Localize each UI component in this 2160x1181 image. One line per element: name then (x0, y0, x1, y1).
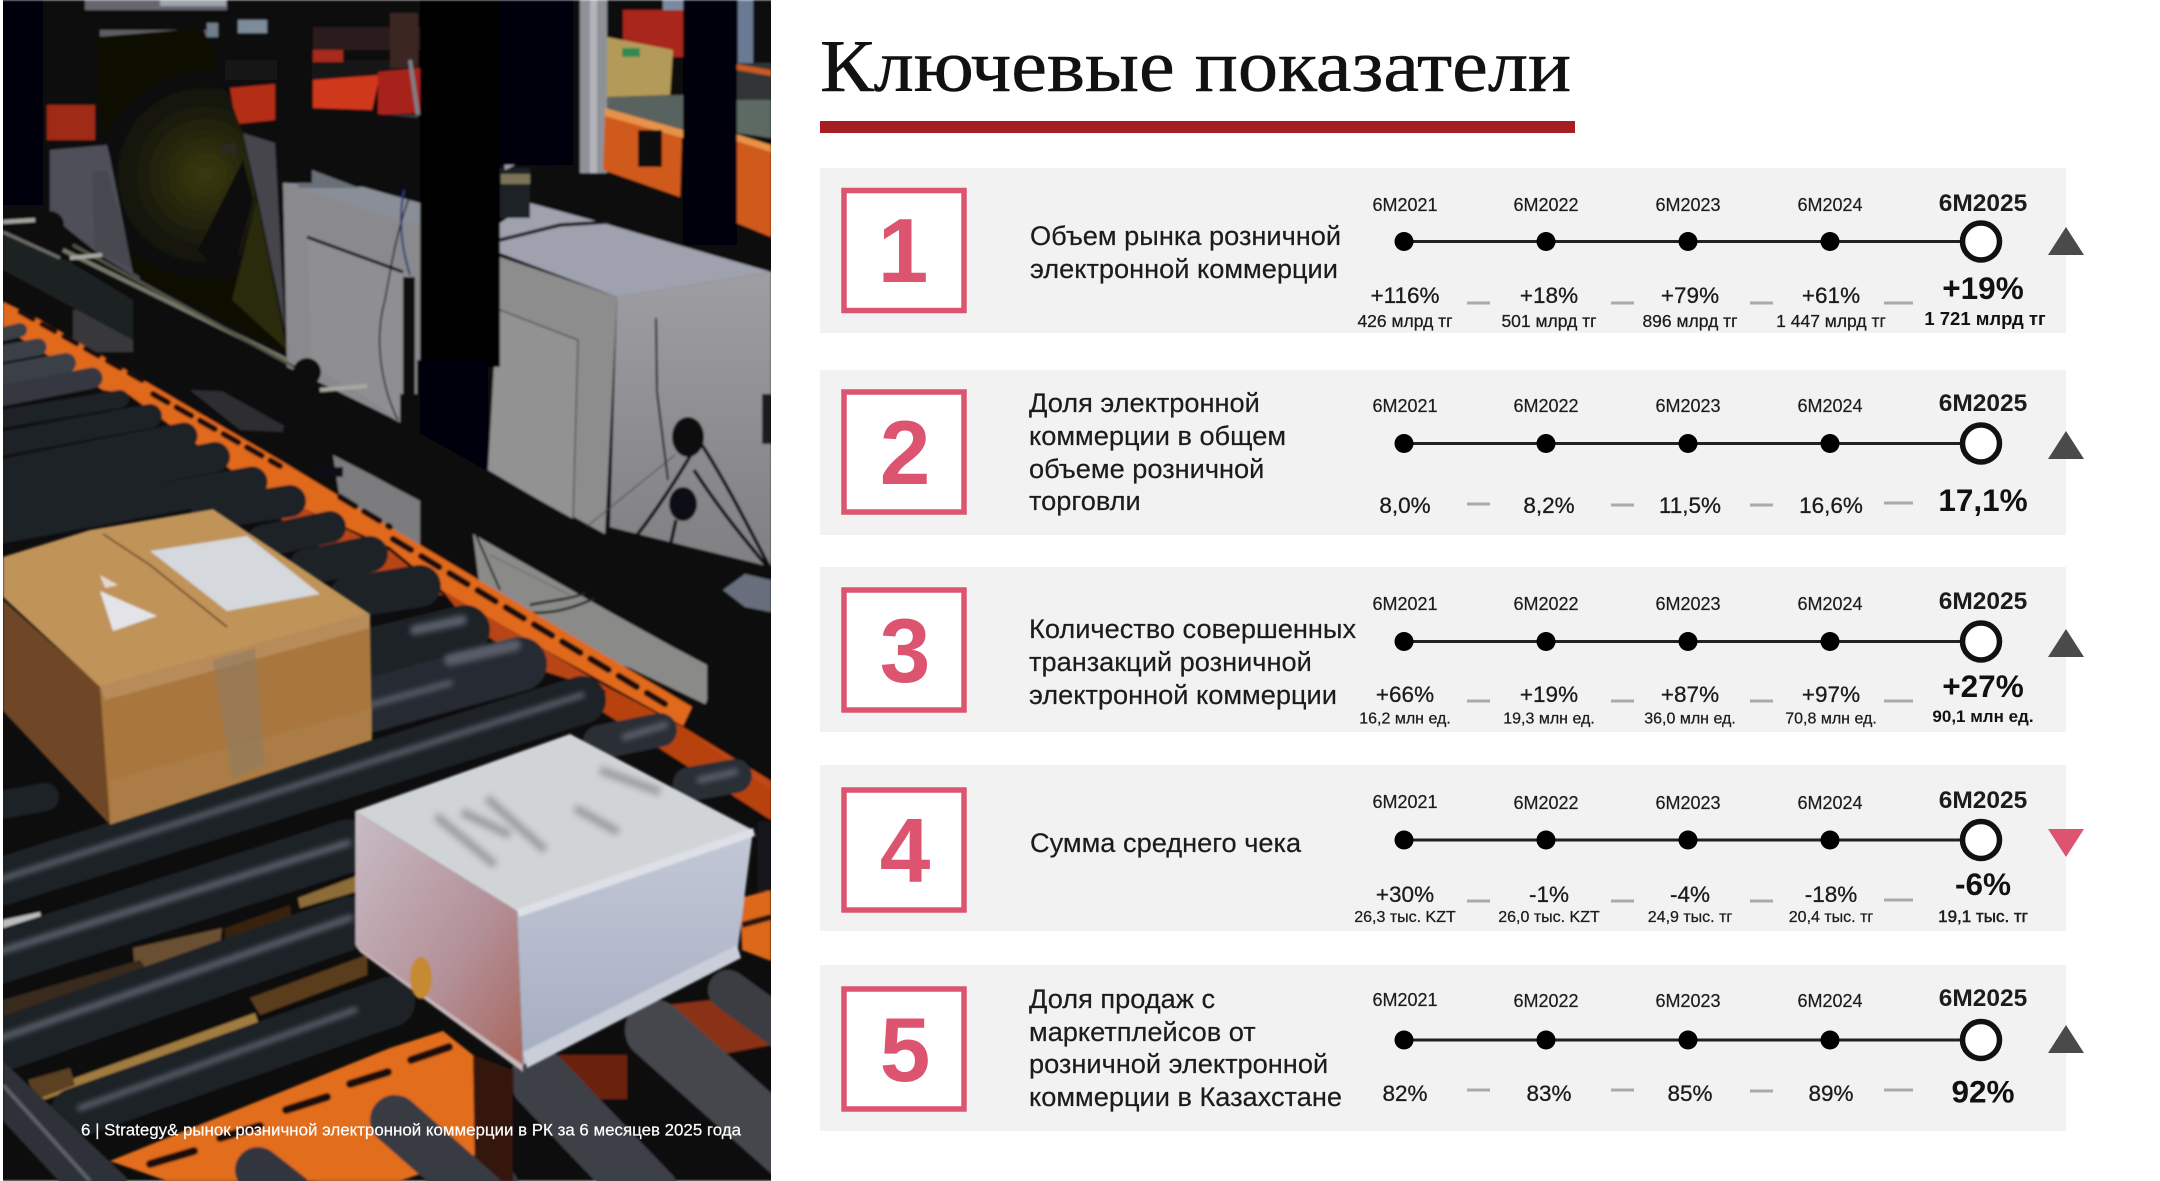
timeline 4: -18% (1805, 882, 1857, 907)
metric 2 description: коммерции в общем (1029, 420, 1286, 451)
timeline 1: 426 млрд тг (1357, 311, 1453, 331)
timeline 4: 6M2024 (1797, 793, 1863, 813)
panel: metric 1 (820, 168, 2084, 333)
timeline 4: 6M2025 (1939, 787, 2027, 814)
timeline 1: 6M2024 (1797, 195, 1863, 215)
timeline 4: -6% (1955, 866, 2011, 902)
timeline 3: 16,2 млн ед. (1359, 710, 1451, 728)
timeline 5: 6M2023 (1655, 991, 1721, 1011)
timeline 5: 6M2024 (1797, 991, 1863, 1011)
number badge 4 (844, 790, 964, 910)
timeline 3: 19,3 млн ед. (1503, 710, 1595, 728)
metric 5 description: розничной электронной (1029, 1048, 1328, 1079)
metric 1 description: электронной коммерции (1030, 253, 1338, 284)
timeline 1: 6M2021 (1372, 195, 1438, 215)
timeline 1 (1357, 190, 2046, 331)
panel: metric 4 (820, 765, 2084, 931)
timeline 1: 1 447 млрд тг (1776, 311, 1886, 331)
timeline 3: 6M2025 (1939, 588, 2027, 615)
timeline 1: 6M2025 (1939, 190, 2027, 217)
timeline 1: +61% (1802, 283, 1860, 308)
metric 3 description: транзакций розничной (1029, 646, 1312, 677)
panel: metric 2 (820, 370, 2084, 535)
timeline 1: +116% (1370, 283, 1440, 308)
metric 4 description: Сумма среднего чека (1030, 827, 1302, 858)
timeline 3: +97% (1802, 682, 1860, 707)
timeline 2: 6M2023 (1655, 396, 1721, 416)
timeline 3: +27% (1942, 668, 2024, 704)
trend down arrow 4 (2048, 829, 2084, 857)
timeline 2: 6M2021 (1372, 396, 1438, 416)
title underline (820, 121, 1575, 133)
number badge 2 (844, 392, 964, 512)
timeline 4 (1354, 787, 2028, 926)
timeline 1: 896 млрд тг (1642, 311, 1738, 331)
metric 2 description: объеме розничной (1029, 453, 1264, 484)
timeline 3: 90,1 млн ед. (1932, 707, 2034, 726)
timeline 4: 26,0 тыс. KZT (1498, 909, 1600, 926)
white box (355, 734, 753, 911)
panel: metric 3 (820, 567, 2084, 732)
panel: metric 5 (820, 965, 2084, 1131)
timeline 3: 6M2023 (1655, 594, 1721, 614)
trend up arrow 5 (2048, 1025, 2084, 1053)
timeline 5 (1372, 985, 2027, 1110)
number badge 1 (844, 190, 964, 310)
timeline 4: +30% (1376, 882, 1434, 907)
metric 2 description: торговли (1029, 485, 1141, 516)
photo: conveyor with parcels (0, 0, 790, 1181)
timeline 1: +79% (1661, 283, 1719, 308)
timeline 3: +87% (1661, 682, 1719, 707)
rollers (0, 330, 790, 1181)
parcel label smudges (436, 770, 660, 865)
timeline 2: 6M2025 (1939, 390, 2027, 417)
metric 3 description: Количество совершенных (1029, 613, 1356, 644)
timeline 3: 6M2021 (1372, 594, 1438, 614)
timeline 2: 6M2022 (1513, 396, 1579, 416)
timeline 2: 6M2024 (1797, 396, 1863, 416)
number badge 3: 3 (880, 601, 930, 702)
timeline 2: 16,6% (1799, 493, 1863, 518)
number badge 2: 2 (880, 403, 930, 504)
footer caption: 6 | Strategy& рынок розничной электронной коммерции в РК за 6 месяцев 2025 года (81, 1120, 742, 1140)
timeline 1: 6M2023 (1655, 195, 1721, 215)
timeline 4: 24,9 тыс. тг (1648, 909, 1732, 926)
timeline 3: +66% (1376, 682, 1434, 707)
timeline 2: 17,1% (1938, 482, 2028, 518)
metric 5 description: коммерции в Казахстане (1029, 1081, 1342, 1112)
timeline 2: 11,5% (1659, 493, 1721, 518)
timeline 5: 89% (1808, 1081, 1854, 1106)
timeline 4: 19,1 тыс. тг (1938, 907, 2028, 926)
timeline 4: 26,3 тыс. KZT (1354, 909, 1456, 926)
timeline 3: 6M2022 (1513, 594, 1579, 614)
number badge 1: 1 (878, 201, 928, 302)
timeline 1: 501 млрд тг (1501, 311, 1597, 331)
timeline 2: 8,2% (1523, 493, 1575, 518)
timeline 3 (1359, 588, 2034, 728)
timeline 4: 6M2022 (1513, 793, 1579, 813)
timeline 1: +19% (1942, 270, 2024, 306)
metric 5 description: Доля продаж с (1029, 983, 1215, 1014)
trend up arrow 2 (2048, 431, 2084, 459)
timeline 4: 6M2023 (1655, 793, 1721, 813)
timeline 3: 6M2024 (1797, 594, 1863, 614)
metric 1 description: Объем рынка розничной (1030, 220, 1341, 251)
timeline 3: 70,8 млн ед. (1785, 710, 1877, 728)
timeline 2: 8,0% (1379, 493, 1431, 518)
trend up arrow 1 (2048, 227, 2084, 255)
timeline 5: 6M2025 (1939, 985, 2027, 1012)
timeline 3: 36,0 млн ед. (1644, 710, 1736, 728)
number badge 4: 4 (880, 801, 931, 902)
timeline 5: 92% (1951, 1074, 2015, 1110)
timeline 1: 1 721 млрд тг (1924, 308, 2046, 329)
timeline 4: 6M2021 (1372, 792, 1438, 812)
timeline 5: 83% (1526, 1081, 1572, 1106)
timeline 5: 6M2022 (1513, 991, 1579, 1011)
number badge 3 (844, 590, 964, 710)
timeline 5: 6M2021 (1372, 990, 1438, 1010)
timeline 1: +18% (1520, 283, 1578, 308)
timeline 2 (1372, 390, 2028, 518)
timeline 4: -4% (1670, 882, 1710, 907)
metric 2 description: Доля электронной (1029, 387, 1260, 418)
metric 3 description: электронной коммерции (1029, 679, 1337, 710)
brown box (3, 509, 370, 687)
timeline 1: 6M2022 (1513, 195, 1579, 215)
timeline 3: +19% (1520, 682, 1578, 707)
timeline 5: 85% (1667, 1081, 1713, 1106)
title: Ключевые показатели (820, 26, 1571, 108)
timeline 4: -1% (1529, 882, 1569, 907)
number badge 5 (844, 989, 964, 1109)
roller highlights (0, 620, 735, 1108)
metric 5 description: маркетплейсов от (1029, 1016, 1256, 1047)
timeline 4: 20,4 тыс. тг (1789, 909, 1873, 926)
number badge 5: 5 (880, 1000, 930, 1101)
timeline 5: 82% (1382, 1081, 1428, 1106)
trend up arrow 3 (2048, 629, 2084, 657)
